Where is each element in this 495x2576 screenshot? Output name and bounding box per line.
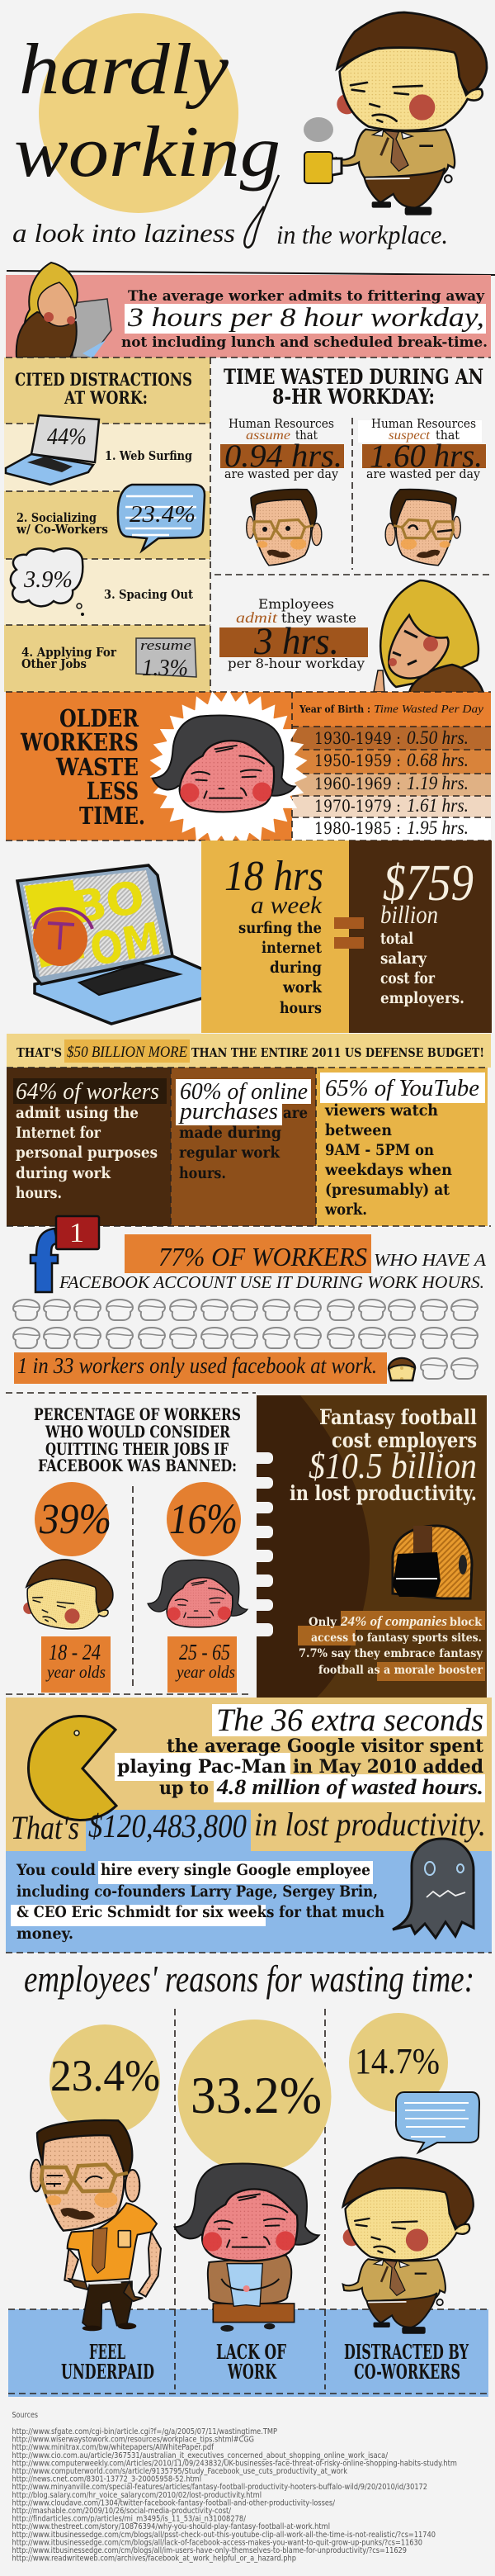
icon: speech bubble: [396, 2092, 479, 2152]
stat: HR assume: Human Resources: [229, 416, 334, 431]
panel: 60% of online purchases: hours.: [179, 1164, 226, 1182]
heading: percentage of workers: PERCENTAGE OF WORKERS: [34, 1404, 241, 1424]
stat: 39%: 39%: [39, 1496, 111, 1543]
heading: time wasted: 8-HR WORKDAY:: [272, 385, 435, 409]
panel: fantasy football: [252, 1395, 487, 1698]
icon: thought cloud 3.9%: 3.9%: [23, 567, 73, 593]
heading: time wasted: [224, 365, 483, 409]
panel: pac-man: up to: [159, 1778, 209, 1799]
table: year of birth: Time Wasted Per Day: [374, 703, 484, 716]
heading: percentage of workers: [34, 1404, 241, 1475]
label: 25 to 65: year olds: [175, 1662, 235, 1682]
stat: 77% of workers: FACEBOOK ACCOUNT USE IT DURING WORK HOURS.: [59, 1272, 484, 1292]
panel: intro banner: The average worker admits to frittering away: [128, 288, 484, 304]
panel: pac-man: playing Pac-Man: [117, 1756, 286, 1778]
panel: 64% of workers: [7, 1068, 171, 1226]
panel: 64% of workers: Internet for: [16, 1124, 101, 1142]
caption: distracted by co-workers: [344, 2340, 469, 2384]
panel: cited distractions: [4, 358, 491, 692]
heading: percentage of workers: FACEBOOK WAS BANNED:: [38, 1456, 237, 1475]
sources list: http://www.cio.com.au/article/367531/australian_it_executives_concerned_about_shopping_online_work_isaca/: [12, 2451, 389, 2460]
title: [14, 30, 280, 248]
sources list: http://mashable.com/2009/10/26/social-media-productivity-cost/: [12, 2507, 232, 2516]
panel: pac-man: [6, 1698, 492, 1853]
heading: older workers: TIME.: [79, 802, 145, 830]
panel: 65% of YouTube viewers: 9AM - 5PM on: [325, 1141, 434, 1159]
stat: employees admit: per 8-hour workday: [228, 656, 365, 671]
stat: HR suspect: are wasted per day: [366, 466, 480, 481]
panel: 65% of YouTube viewers: between: [325, 1121, 392, 1139]
notebook notches: [252, 1452, 273, 1636]
starburst: [149, 689, 308, 848]
stat: 77% of workers: [59, 1234, 486, 1292]
banner: defense budget: $50 BILLION MORE: [67, 1044, 187, 1061]
sources list: http://www.readwriteweb.com/archives/facebook_at_work_helpful_or_a_hazard.php: [12, 2555, 296, 2564]
illustration: BOOM laptop: [17, 865, 228, 1024]
stat: HR suspect: Human Resources: [371, 416, 476, 431]
stat: 23.4%: 23.4%: [50, 2051, 160, 2100]
panel: $759 billion: employers.: [380, 989, 464, 1007]
caption: lack of work: [216, 2340, 286, 2384]
panel: 18 hrs: during: [270, 959, 322, 977]
panel: 18 hrs: a week: [251, 892, 323, 919]
sources list: http://www.itbusinessedge.com/cm/blogs/all/im-users-have-only-themselves-to-blame-for-unproductivity/?cs=11629: [12, 2546, 407, 2555]
panel: 60% of online purchases: 60% of online: [180, 1078, 308, 1105]
stat: employees admit: they waste: [281, 610, 356, 626]
subtitle: in the workplace.: [276, 220, 448, 249]
illustration: BOOM laptop: OM: [86, 912, 165, 976]
heading: percentage of workers: QUITTING THEIR JOBS IF: [45, 1439, 229, 1459]
table: year of birth: 0.68 hrs.: [407, 750, 469, 770]
label: spacing out: 3. Spacing Out: [104, 587, 193, 602]
panel: 18 hrs: internet: [262, 939, 322, 957]
heading: cited distractions: CITED DISTRACTIONS: [15, 369, 192, 390]
icon: resume 1.3%: 1.3%: [142, 656, 188, 681]
stat: employees admit: admit: [236, 609, 278, 626]
sources list: Sources: [12, 2411, 38, 2420]
pictogram: rows of heads: [13, 1300, 478, 1379]
sources list: http://www.wiserwaystowork.com/resources/workplace_tips.shtml#CGG: [12, 2436, 254, 2445]
text: fantasy sports blocking: [298, 1611, 485, 1681]
title: hardly: [19, 30, 229, 110]
stat: 33.2%: 33.2%: [191, 2066, 322, 2124]
text: fantasy sports blocking: block: [450, 1616, 482, 1629]
stat: 16%: [167, 1482, 241, 1556]
sources list: http://blog.salary.com/hr_voice_salarycom/2010/02/lost-productivity.html: [12, 2491, 262, 2500]
character: HR face, winking: [385, 490, 460, 566]
text: fantasy sports blocking: Only: [309, 1616, 337, 1629]
panel: intro banner: [6, 263, 491, 358]
subtitle: [12, 218, 448, 249]
label: web surfing: 1. Web Surfing: [105, 448, 192, 463]
panel: 60% of online purchases: purchases: [178, 1098, 278, 1125]
caption: lack of work: LACK OF: [216, 2340, 286, 2364]
table: year of birth: 1950-1959 :: [314, 751, 401, 770]
panel: 64% of workers: personal purposes: [16, 1144, 158, 1162]
stat: HR assume: assume: [246, 429, 290, 443]
panel: 18 hrs: hours: [280, 999, 322, 1017]
callout: 1 in 33: 1 in 33 workers only used facebook at work.: [17, 1353, 377, 1378]
panel: hire every google employee: You could: [16, 1861, 96, 1879]
sources list: http://www.minyanville.com/special-features/articles/fantasy-football-productivity-hooters-buffalo-wild/9/20/2010/id/30172: [12, 2483, 427, 2492]
stat: 77% of workers: 77% OF WORKERS: [158, 1242, 367, 1271]
label: 18 to 24: year olds: [45, 1662, 106, 1682]
label: 25 to 65: 25 - 65: [179, 1640, 230, 1664]
icon: laptop 44%: [6, 415, 99, 485]
panel: 64% of workers: during work: [16, 1164, 111, 1182]
character: older woman head: [153, 716, 295, 812]
character: man with coffee: [337, 12, 487, 215]
icon: facebook f with notification: [31, 1216, 99, 1292]
label: 25 to 65: [167, 1636, 237, 1693]
stat: 14.7%: 14.7%: [355, 2041, 440, 2081]
label: applying for other jobs: 4. Applying For: [21, 645, 117, 660]
subtitle: a look into laziness: [12, 218, 235, 248]
panel: hire every google employee: hire every single Google employee: [101, 1861, 370, 1879]
label: applying for other jobs: Other Jobs: [21, 656, 87, 671]
stat: HR suspect: suspect: [389, 429, 431, 443]
stat: 77% of workers: WHO HAVE A: [374, 1250, 486, 1270]
icon: resume 1.3%: resume: [140, 637, 192, 653]
caption: lack of work: WORK: [227, 2360, 277, 2384]
heading: percentage of workers: WHO WOULD CONSIDER: [45, 1422, 230, 1442]
panel: intro banner: 3 hours per 8 hour workday,: [127, 303, 484, 333]
stat: 39%: [35, 1482, 111, 1556]
equals sign: [334, 917, 364, 949]
table: year of birth: 1.61 hrs.: [407, 795, 469, 816]
caption: feel underpaid: UNDERPAID: [61, 2360, 154, 2384]
table: year of birth: 1930-1949 :: [314, 728, 401, 748]
heading: older workers: WASTE: [55, 753, 139, 781]
character: HR face, eyes open: [247, 490, 322, 566]
panel: 65% of YouTube viewers: 65% of YouTube: [325, 1075, 479, 1101]
banner: defense budget: [7, 1034, 491, 1068]
panel: hire every google employee: including co-founders Larry Page, Sergey Brin,: [16, 1882, 378, 1901]
stat: employees admit: [219, 596, 368, 671]
label: applying for other jobs: [21, 645, 117, 671]
sources list: http://news.cnet.com/8301-13772_3-20005958-52.html: [12, 2475, 201, 2484]
panel: 18 hrs: surfing the: [238, 919, 322, 937]
panel: pac-man: 4.8 million of wasted hours.: [216, 1775, 483, 1799]
table: year of birth: 1970-1979 :: [314, 796, 401, 816]
panel: 65% of YouTube viewers: viewers watch: [324, 1101, 438, 1120]
character: woman at laptop: [16, 263, 111, 358]
stat: HR suspect: 1.60 hrs.: [370, 438, 483, 474]
character: young man head: [21, 1555, 117, 1635]
panel: 60% of online purchases: [171, 1068, 316, 1226]
panel: time wasted: [214, 365, 491, 694]
header circle: [39, 13, 238, 213]
stat: HR assume: [220, 416, 344, 481]
stat: HR assume: are wasted per day: [224, 466, 338, 481]
panel: pac-man: the average Google visitor spent: [167, 1735, 484, 1757]
text: fantasy football cost: $10.5 billion: [309, 1446, 477, 1486]
character: lack of work woman: [175, 2164, 319, 2332]
icon: facebook f with notification: 1: [69, 1218, 84, 1248]
stat: 16%: 16%: [169, 1496, 238, 1543]
panel: $759 billion: total: [380, 930, 413, 948]
heading: older workers: OLDER: [59, 704, 139, 732]
panel: pac-man: The 36 extra seconds: [216, 1702, 483, 1738]
label: socializing: 2. Socializing: [16, 510, 97, 525]
label: socializing: w/ Co-Workers: [16, 522, 108, 537]
panel: $759 billion: billion: [380, 900, 438, 929]
sources list: http://www.itbusinessedge.com/cm/blogs/all/lack-of-facebook-access-makes-you-want-to-quit-grow-up-punks/?cs=11630: [12, 2538, 422, 2547]
blue caption band: [8, 2309, 488, 2397]
stat: employees admit: 3 hrs.: [253, 620, 339, 663]
icon: laptop 44%: 44%: [47, 424, 87, 450]
icon: speech bubble 23.4%: 23.4%: [130, 501, 196, 528]
header rule: [7, 271, 495, 275]
panel: intro banner: not including lunch and scheduled break-time.: [121, 334, 488, 350]
sources list: http://www.thestreet.com/story/10876394/why-you-should-play-fantasy-football-at-work.html: [12, 2522, 330, 2531]
icon: football helmet: [393, 1526, 472, 1598]
stat: employees admit: Employees: [258, 596, 334, 612]
panel: $759 billion: [349, 841, 492, 1033]
icon: ghost: [393, 1839, 474, 1938]
sources list: http://www.computerworld.com/s/article/9135795/Study_Facebook_use_cuts_productivity_at_work: [12, 2467, 347, 2476]
panel: hire every google employee: & CEO Eric Schmidt for six weeks for that much: [16, 1903, 384, 1921]
text: fantasy football cost: [290, 1405, 477, 1505]
panel: 65% of YouTube viewers: weekdays when: [324, 1161, 452, 1179]
stat: HR assume: that: [295, 428, 318, 443]
sources list: http://www.itbusinessedge.com/cm/blogs/all/psst-check-out-this-youtube-clip-all-work-all-the-time-is-not-realistic/?cs=11740: [12, 2531, 436, 2540]
stat: HR suspect: [358, 416, 486, 481]
panel: hire every google employee: [6, 1839, 492, 1953]
table: year of birth: 1.95 hrs.: [407, 817, 469, 838]
panel: facebook ban: [6, 1393, 256, 1694]
caption: feel underpaid: FEEL: [89, 2340, 125, 2364]
table: year of birth: 1.19 hrs.: [407, 773, 469, 793]
title: working: [14, 112, 280, 192]
label: 18 to 24: 18 - 24: [49, 1640, 101, 1664]
panel: 64% of workers: 64% of workers: [16, 1078, 159, 1105]
stat: HR assume: 0.94 hrs.: [224, 438, 342, 474]
panel: 64% of workers: hours.: [16, 1184, 62, 1202]
text: fantasy sports blocking: 24% of companies: [340, 1613, 447, 1629]
icon: thought cloud 3.9%: [11, 548, 84, 616]
sources list: http://www.sfgate.com/cgi-bin/article.cgi?f=/g/a/2005/07/11/wastingtime.TMP: [12, 2427, 277, 2436]
panel: 64% of workers: admit using the: [16, 1104, 139, 1122]
icon: coffee mug and steam: [304, 117, 342, 183]
heading: older workers: WORKERS: [20, 728, 139, 756]
panel: $759 billion: cost for: [380, 969, 436, 987]
panel: 60% of online purchases: are: [283, 1104, 308, 1122]
sources list: http://www.cloudave.com/1304/twitter-facebook-fantasy-football-and-other-productivity-losses/: [12, 2498, 336, 2507]
character: blonde woman: [374, 580, 483, 694]
sources list: http://findarticles.com/p/articles/mi_m3495/is_11_53/ai_n31008278/: [12, 2515, 247, 2524]
icon: resume 1.3%: [136, 637, 196, 681]
table: year of birth: Year of Birth :: [299, 703, 370, 715]
heading: cited distractions: AT WORK:: [64, 387, 148, 408]
character: distracted man: [343, 2157, 474, 2334]
stat: 33.2%: [178, 2020, 332, 2173]
banner: defense budget: THAT'S: [16, 1045, 62, 1060]
panel: 65% of YouTube viewers: [316, 1068, 488, 1226]
panel: pac-man: That's: [11, 1809, 79, 1846]
panel: older workers: [6, 689, 491, 848]
text: fantasy sports blocking: football as a morale booster: [318, 1664, 483, 1677]
panel: 65% of YouTube viewers: (presumably) at: [325, 1181, 450, 1199]
caption: feel underpaid: [61, 2340, 154, 2384]
panel: 18 hrs: work: [282, 978, 323, 997]
heading: older workers: [20, 704, 145, 830]
stat: 14.7%: [349, 2013, 448, 2112]
sources list: [12, 2411, 457, 2564]
panel: 60% of online purchases: regular work: [179, 1144, 280, 1162]
character: older woman head: [148, 1560, 248, 1627]
panel: 18 hrs: [201, 841, 349, 1033]
label: socializing: [16, 510, 108, 537]
text: fantasy sports blocking: 7.7% say they embrace fantasy: [299, 1647, 483, 1660]
character: feel underpaid man: [31, 2120, 161, 2331]
panel: 65% of YouTube viewers: work.: [324, 1200, 367, 1219]
heading: older workers: LESS: [87, 777, 139, 805]
panel: pac-man: $120,483,800: [88, 1807, 247, 1844]
icon: pac-man: [28, 1716, 116, 1820]
icon: speech bubble 23.4%: [118, 485, 205, 551]
illustration: BOOM laptop: BO: [68, 870, 148, 935]
table: year of birth: [299, 703, 484, 838]
panel: hire every google employee: money.: [16, 1925, 73, 1943]
stat: HR suspect: that: [436, 428, 460, 443]
stat: 23.4%: [50, 2024, 160, 2135]
label: 18 to 24: [41, 1636, 111, 1693]
panel: pac-man: in May 2010 added: [293, 1756, 483, 1778]
panel: $759 billion: $759: [383, 855, 474, 912]
table: year of birth: 1960-1969 :: [314, 774, 401, 793]
panel: 60% of online purchases: made during: [179, 1124, 281, 1142]
table: year of birth: 0.50 hrs.: [407, 727, 469, 748]
table: year of birth: 1980-1985 :: [314, 818, 401, 838]
panel: 18 hrs: 18 hrs: [224, 853, 323, 900]
heading: cited distractions: [15, 369, 192, 408]
icon: coloured head: [389, 1358, 415, 1380]
sources list: http://www.minitrax.com/bw/whitepapers/AIWhitePaper.pdf: [12, 2443, 214, 2452]
panel: $759 billion: salary: [380, 949, 427, 968]
